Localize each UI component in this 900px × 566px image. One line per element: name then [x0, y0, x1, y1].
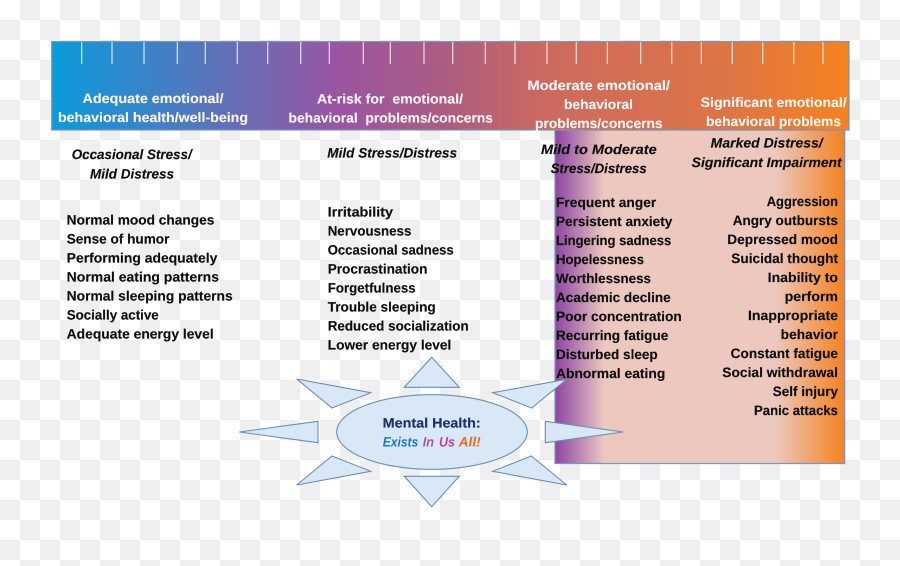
subheading: mild to moderate — [541, 142, 657, 176]
heading: moderate: problems/concerns — [535, 116, 663, 131]
list: at-risk signs: Procrastination — [328, 261, 427, 276]
list: adequate signs: Normal sleeping patterns — [67, 288, 233, 304]
list: significant signs: Constant fatigue — [731, 346, 838, 361]
subheading: marked distress — [692, 135, 842, 170]
list: adequate signs: Sense of humor — [67, 232, 170, 246]
subheading: occasional stress: Mild Distress — [90, 167, 174, 182]
list: significant signs: perform — [785, 289, 838, 304]
subheading: marked distress: Significant Impairment — [692, 155, 842, 170]
list: adequate signs: Normal mood changes — [67, 212, 214, 228]
list: moderate signs: Frequent anger — [556, 195, 657, 210]
heading: at-risk: behavioral problems/concerns — [288, 110, 493, 126]
list: adequate signs: Socially active — [67, 308, 159, 322]
list: at-risk signs: Lower energy level — [328, 337, 451, 352]
list: significant signs: Depressed mood — [727, 232, 838, 247]
heading: significant: Significant emotional/ — [701, 95, 847, 110]
list: at-risk signs: Trouble sleeping — [328, 299, 436, 314]
heading: moderate — [528, 78, 670, 131]
sun label: Exists — [383, 435, 419, 450]
list: adequate signs: Performing adequately — [67, 250, 218, 266]
sun label: Us — [439, 435, 455, 450]
list: moderate signs: Persistent anxiety — [556, 214, 673, 229]
heading: at-risk: At-risk for emotional/ — [317, 92, 463, 106]
heading: adequate — [58, 91, 248, 125]
sun label — [383, 416, 481, 450]
list: moderate signs: Hopelessness — [556, 252, 644, 267]
list: at-risk signs — [328, 204, 469, 352]
sun label: Mental Health: — [383, 416, 481, 431]
subheading: mild stress: Mild Stress/Distress — [327, 146, 457, 160]
sun label: All! — [458, 435, 481, 450]
subheading: marked distress: Marked Distress/ — [711, 135, 824, 150]
sun rays — [239, 357, 623, 507]
list: significant signs: behavior — [781, 327, 839, 342]
sun label: In — [423, 435, 434, 450]
list: at-risk signs: Nervousness — [328, 223, 411, 238]
heading: moderate: behavioral — [564, 97, 633, 112]
heading: at-risk — [288, 92, 493, 126]
heading: significant: behavioral problems — [706, 114, 841, 129]
subheading: mild to moderate: Stress/Distress — [551, 161, 647, 176]
heading: significant — [701, 95, 847, 129]
heading: adequate: behavioral health/well-being — [58, 110, 248, 125]
list: moderate signs: Disturbed sleep — [556, 347, 658, 362]
list: significant signs: Inability to — [768, 270, 838, 285]
list: moderate signs: Abnormal eating — [556, 366, 665, 381]
heading: moderate: Moderate emotional/ — [528, 78, 670, 93]
list: moderate signs: Academic decline — [556, 290, 671, 305]
list: moderate signs — [556, 195, 682, 381]
gradient continuum banner — [52, 42, 849, 130]
diagram: mental health sun — [239, 357, 623, 507]
list: significant signs: Suicidal thought — [731, 251, 838, 266]
list: moderate signs: Recurring fatigue — [556, 328, 669, 343]
list: adequate signs: Adequate energy level — [67, 326, 214, 342]
list: at-risk signs: Irritability — [328, 204, 393, 219]
subheading: occasional stress — [72, 147, 193, 182]
list: adequate signs — [67, 212, 233, 342]
list: significant signs: Panic attacks — [754, 403, 838, 418]
list: at-risk signs: Reduced socialization — [328, 318, 469, 333]
list: adequate signs: Normal eating patterns — [67, 270, 219, 284]
subheading: occasional stress: Occasional Stress/ — [72, 147, 193, 162]
heading: adequate: Adequate emotional/ — [82, 91, 224, 106]
list: at-risk signs: Occasional sadness — [328, 242, 454, 257]
subheading: mild to moderate: Mild to Moderate — [541, 142, 657, 157]
list: moderate signs: Lingering sadness — [556, 233, 671, 248]
panel: moderate to significant distress — [555, 130, 845, 464]
list: significant signs: Inappropriate — [748, 308, 838, 323]
list: significant signs: Social withdrawal — [722, 365, 838, 380]
list: significant signs — [722, 194, 839, 418]
list: at-risk signs: Forgetfulness — [328, 280, 416, 295]
list: moderate signs: Poor concentration — [556, 309, 682, 324]
sun centre ellipse — [337, 395, 527, 469]
list: significant signs: Aggression — [767, 194, 838, 209]
list: moderate signs: Worthlessness — [556, 271, 651, 286]
list: significant signs: Angry outbursts — [733, 213, 838, 228]
list: significant signs: Self injury — [773, 384, 838, 399]
